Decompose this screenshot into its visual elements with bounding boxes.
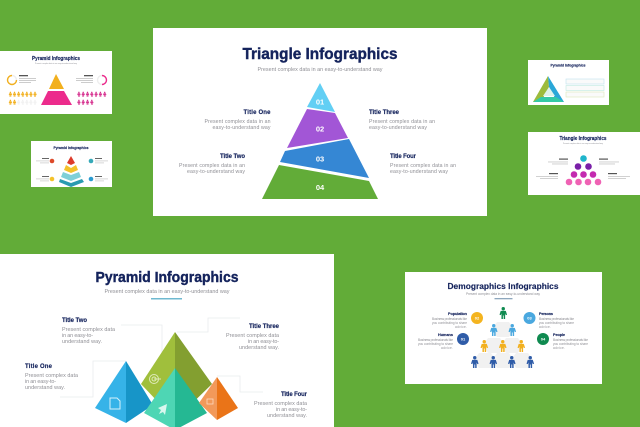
badge 02 [471, 312, 483, 324]
people: blue row [490, 324, 516, 336]
text block: title one: in an easy-to- [25, 379, 56, 385]
pyramid: blue left [95, 361, 153, 423]
text: population: Population [448, 312, 468, 316]
text block: title three: Title Three [369, 110, 400, 116]
badge 04 [537, 333, 549, 345]
pyramid: teal front [144, 368, 207, 427]
text block: title two: Title Two [220, 154, 245, 160]
people pink [77, 92, 106, 105]
text block: title four: in an easy-to- [276, 407, 307, 413]
title: Pyramid Infographics [550, 64, 586, 68]
pyramid: orange right [199, 377, 238, 420]
people yellow placeholders [17, 100, 37, 105]
pyramid pink [41, 91, 72, 105]
leader lines [60, 318, 263, 397]
ring right [98, 76, 106, 84]
text: people: Business professionals like [553, 338, 588, 342]
text block: title three: Title Three [249, 324, 280, 330]
segment 02 [287, 109, 348, 148]
subtitle: Present complex data in an easy-to-understand way [466, 292, 540, 296]
text block: title four [390, 154, 456, 175]
panel: small triangle with rows [528, 60, 609, 105]
text block: title two: Present complex data [62, 327, 115, 333]
segment 03 [280, 139, 369, 178]
text: population: you contributing to share [432, 321, 467, 325]
circles [566, 155, 601, 185]
text: humans: Humans [438, 333, 453, 337]
text block: title one [25, 364, 78, 391]
text block: title four: Present complex data in an [390, 163, 456, 169]
panel: pyramid infographics large [0, 254, 334, 427]
badge 03 [524, 312, 536, 324]
text block: title four: Present complex data [254, 401, 307, 407]
triangle [533, 76, 564, 102]
text: persons [539, 312, 574, 329]
segment 03: 03 [316, 154, 324, 164]
badge 01 [457, 333, 469, 345]
text: people: People [553, 333, 565, 337]
badge 01: 01 [461, 336, 466, 342]
text block: title four: easy-to-understand way [390, 169, 448, 175]
panel: demographics infographics [405, 272, 602, 384]
text block: title three: in an easy-to- [248, 339, 279, 345]
text: humans: you contributing to share [418, 342, 453, 346]
text block: title four: Title Four [390, 154, 417, 160]
text block: title three [226, 324, 280, 351]
badge 03: 03 [527, 316, 532, 320]
small labels [536, 158, 630, 179]
people: green top [500, 307, 507, 319]
pyramid yellow [49, 74, 64, 89]
text: humans [418, 333, 453, 350]
rows [566, 79, 604, 97]
platforms [474, 322, 533, 368]
text block: title one: Title One [25, 364, 53, 370]
text block: title one: Title One [244, 110, 271, 116]
badge 04: 04 [541, 336, 546, 342]
dots [50, 159, 93, 181]
text: population [432, 312, 468, 329]
text block: title one: Present complex data [25, 373, 78, 379]
text block: title one: Present complex data in an [204, 119, 271, 125]
text: persons: Business professionals like [539, 317, 574, 321]
segment 04: 04 [316, 183, 325, 192]
segment 04 [262, 165, 378, 199]
panel: small pyramid with people [0, 51, 112, 114]
small text left [19, 75, 36, 83]
text block: title two: easy-to-understand way [187, 169, 245, 175]
title: Triangle Infographics [560, 136, 607, 142]
text block: title three: Present complex data [226, 333, 279, 339]
ring left [8, 76, 16, 84]
small text right [76, 75, 93, 83]
title: Triangle Infographics [242, 46, 398, 63]
text block: title four: Title Four [281, 392, 308, 398]
small labels [36, 158, 108, 181]
text block: title two: Title Two [62, 318, 87, 324]
text block: title two [62, 318, 115, 345]
underline [151, 298, 182, 300]
text block: title three: easy-to-understand way [369, 125, 427, 131]
text block: title one [204, 110, 271, 131]
text: population: Business professionals like [432, 317, 467, 321]
segment 01 [307, 83, 335, 112]
subtitle: Present complex data in an easy-to-understand way [563, 142, 603, 145]
text block: title two: in an easy-to- [62, 333, 93, 339]
subtitle: Present complex data in an easy-to-understand way [258, 67, 383, 73]
title: Demographics Infographics [448, 281, 559, 291]
title: Pyramid Infographics [96, 269, 238, 286]
segment 02: 02 [316, 124, 324, 134]
text block: title one: easy-to-understand way [212, 125, 271, 131]
pyramid: olive back [141, 332, 212, 420]
text block: title three: understand way. [239, 345, 279, 351]
people yellow [9, 92, 37, 105]
text: humans: advice. [441, 346, 453, 350]
text block: title one: understand way. [25, 385, 65, 391]
people: navy row [471, 356, 534, 368]
layered pyramid [59, 156, 84, 187]
segment 01: 01 [316, 98, 324, 106]
badge 02: 02 [475, 316, 480, 320]
text: persons: you contributing to share [539, 321, 574, 325]
text block: title three: Present complex data in an [369, 119, 435, 125]
subtitle: Present complex data in an easy-to-understand way [104, 289, 230, 295]
underline [494, 298, 512, 299]
text block: title two: Present complex data in an [179, 163, 245, 169]
icon: target [150, 374, 161, 384]
title: Pyramid Infographics [32, 56, 80, 62]
panel: small layered pyramid [31, 141, 112, 187]
text block: title four: understand way. [267, 413, 307, 419]
text block: title four [254, 392, 308, 419]
text block: title two [179, 154, 245, 175]
text: people: advice. [553, 346, 565, 350]
text: persons: advice. [539, 325, 551, 329]
text: persons: Persons [539, 312, 553, 316]
panel: triangle infographics [153, 28, 487, 216]
people: yellow row [481, 340, 525, 352]
text: population: advice. [455, 325, 467, 329]
title: Pyramid Infographics [54, 146, 88, 150]
text: people: you contributing to share [553, 342, 588, 346]
text: people [553, 333, 588, 350]
subtitle: Present complex data in an easy-to-understand way [35, 62, 77, 65]
panel: small triangle of circles [528, 132, 640, 195]
text: humans: Business professionals like [418, 338, 453, 342]
text block: title two: understand way. [62, 339, 102, 345]
text block: title three [369, 110, 435, 131]
